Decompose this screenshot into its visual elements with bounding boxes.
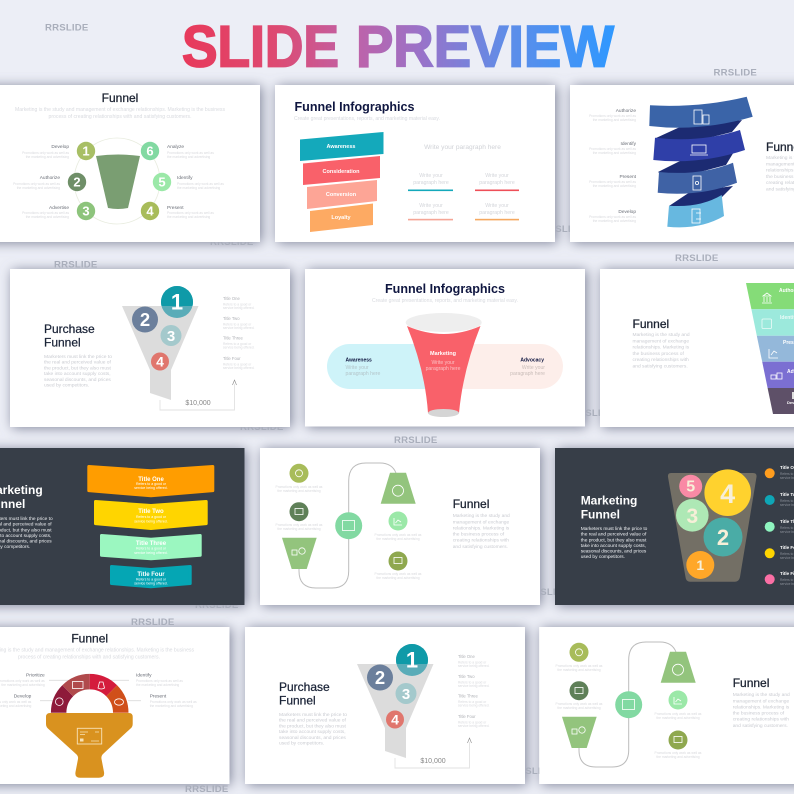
watermarks: RRSLIDE [511,766,555,777]
paragraph placeholders [408,144,519,220]
cone text: Marketing [430,351,456,357]
description: the business process of [453,532,505,538]
heading: Funnel Infographics [294,100,415,114]
value arrow: $10,000 [185,400,211,407]
connector path [299,463,396,588]
heading: Purchase [279,680,330,694]
description: the real and perceived value of [44,360,112,366]
heading: Funnel [71,632,108,646]
subtitle: Create great presentations, reports, and marketing material easy. [372,298,518,304]
cone text: Write your [431,360,455,366]
description: Marketing is the study and [453,513,510,519]
description: take into account supply costs, [279,729,346,735]
ring [74,138,160,224]
step labels: the marketing and advertising [167,215,210,219]
titles list: service being offered. [458,704,490,708]
description [15,107,225,120]
description: the business process of [733,710,785,716]
cone text: paragraph here [426,366,461,372]
titles list [223,296,255,370]
titles list: Title One [223,296,241,301]
labels: the marketing and advertising [593,151,636,155]
description: the product, but they also must [581,537,647,543]
watermarks: RRSLIDE [541,224,585,235]
cone [406,313,482,417]
panel: funnel with awareness and advocacy pills [305,269,585,426]
stacked bars: Conversion [326,192,357,198]
watermarks: RRSLIDE [394,435,438,446]
stacked bars: Loyalty [331,215,352,221]
ribbon bands [649,97,753,227]
heading [44,322,95,350]
description [632,332,690,370]
titles list: Refers to a good or [223,302,252,306]
titles list: Refers to a good or [223,362,252,366]
chevron text: service being offered. [134,520,168,524]
titles list: Refers to a good or [458,660,487,664]
captions [556,664,702,759]
description: used by competitors. [279,740,324,746]
titles list: Title One [458,654,476,659]
panel: funnel with six numbered steps [0,85,260,242]
paragraph placeholders: Write your [485,203,509,209]
labels: the marketing and advertising [150,704,193,708]
heading: Funnel Infographics [385,282,505,296]
labels: Prioritize [26,673,45,679]
numbered balls [132,286,193,370]
circles [570,643,688,750]
watermarks: RRSLIDE [571,408,615,419]
titles list: service being offered. [223,326,255,330]
labels: Develop [14,694,32,700]
captions: the marketing and advertising [277,527,321,531]
step labels: the marketing and advertising [26,215,69,219]
description [44,354,112,388]
numbered circles: 4 [146,204,154,218]
numbered balls: 1 [406,648,418,672]
chevrons [89,466,213,587]
numbered balls: 4 [391,712,399,728]
big funnel [46,713,133,778]
labels: the marketing and advertising [136,683,179,687]
panel: arch funnel [0,627,230,784]
description: and satisfying customers. [733,723,788,729]
chevron text: Title One [138,477,164,483]
numbered circles: 1 [82,144,90,158]
numbered balls: 1 [171,290,183,314]
heading: Funnel [279,694,316,708]
watermarks: RRSLIDE [675,253,719,264]
funnels [282,473,416,569]
description: process of creating relationships with and satisfying customers. [18,654,160,660]
title [182,14,614,80]
chevron text: service being offered. [134,582,168,586]
description [733,692,790,729]
heading: Funnel [44,336,81,350]
stacked bars [300,132,384,232]
heading [0,483,43,511]
description: Marketing is the study and management of exchange relationships. Marketing is the business [15,107,225,113]
description: management of exchange [453,520,510,526]
value arrow [395,738,472,768]
step labels: Develop [51,144,69,150]
panel: dark chevron funnel [0,448,244,605]
description: take into account supply costs, [44,371,111,377]
awareness text [346,358,381,377]
titles list: Title Four [223,356,241,361]
step labels: Promotions only work as well as [22,151,69,155]
balls: 2 [717,525,729,550]
numbered balls: 3 [402,686,410,703]
captions: the marketing and advertising [376,576,420,580]
panel: layered funnel [600,269,794,427]
description: seasonal discounts, and prices [44,377,111,383]
advocacy text: paragraph here [510,371,545,377]
funnels [562,652,696,748]
captions: Promotions only work as well as [655,712,702,716]
description: relationships. Marketing is [453,526,510,532]
description: and satisfying customers. [632,364,688,370]
labels: Promotions only work as well as [589,180,636,184]
chevron text: Title Four [137,572,165,578]
chevron text [134,477,168,586]
card icon [77,728,102,744]
numbered circles: 5 [158,174,166,190]
panel: funnel infographics stacked bars [275,85,555,242]
heading: Marketing [581,494,637,508]
layer icons and labels [762,288,794,405]
description: Marketers must link the price to [581,526,648,532]
balls: 5 [686,479,695,496]
description: creating relationships with [453,538,509,544]
labels [589,108,637,223]
captions: the marketing and advertising [376,537,420,541]
description: management of exchange [632,338,689,344]
advocacy text: Advocacy [520,358,544,364]
description [453,513,510,550]
description [279,712,347,746]
labels: the marketing and advertising [593,184,636,188]
stacked bars: Consideration [323,169,360,175]
description: relationships. Marketing is [733,704,790,710]
paragraph placeholders: paragraph here [479,210,515,216]
captions: Promotions only work as well as [556,702,603,706]
paragraph placeholders: Write your [485,173,509,179]
numbered circles: 6 [146,144,154,158]
labels: Promotions only work as well as [589,215,636,219]
labels: Present [150,694,167,700]
funnel shape [96,154,140,209]
captions: the marketing and advertising [656,755,700,759]
step labels: the marketing and advertising [17,186,60,190]
panel: blue ribbon funnel [570,85,794,242]
advocacy text: Write your [522,365,545,371]
watermarks: RRSLIDE [714,68,757,78]
step labels: the marketing and advertising [177,186,220,190]
captions: Promotions only work as well as [276,523,323,527]
panel: purchase funnel (row 4) [279,644,525,774]
funnel layers [746,283,794,414]
heading [279,680,330,708]
description: Marketing is the study and [632,332,690,338]
titles list [458,654,490,728]
captions: the marketing and advertising [656,716,700,720]
chevron text: Title Two [138,509,164,515]
numbered circles: 3 [82,204,90,218]
watermarks: RRSLIDE [45,22,89,34]
titles list: Title Two [223,316,240,321]
heading: Funnel [453,497,489,511]
chevron text: Refers to a good or [136,482,167,486]
captions: the marketing and advertising [277,489,321,493]
panel: dark marketing funnel with balls [555,448,794,605]
description [766,155,794,192]
step labels: the marketing and advertising [26,155,69,159]
labels: Promotions only work as well as [150,700,197,704]
chevron text: Title Three [136,541,167,547]
step labels: Promotions only work as well as [177,182,224,186]
subtitle: Create great presentations, reports, and marketing material easy. [294,116,440,122]
balls: 1 [696,557,704,573]
balls [676,469,751,579]
labels: Identify [136,673,152,679]
captions: Promotions only work as well as [375,572,422,576]
titles list: Title Two [458,674,475,679]
labels: the marketing and advertising [593,219,636,223]
titles list: Title Three [223,336,243,340]
paragraph placeholders: Write your [419,203,443,209]
description: Marketing is the study and [733,692,790,698]
titles list: service being offered. [223,346,255,350]
description: the real and perceived value of [279,718,347,724]
awareness text: Write your [346,365,369,371]
labels [0,673,197,708]
description: the real and perceived value of [581,532,647,538]
captions: Promotions only work as well as [375,533,422,537]
balls: 4 [720,479,735,509]
paragraph placeholders: paragraph here [413,210,449,216]
titles list: service being offered. [458,724,490,728]
description [0,648,194,660]
watermarks: RRSLIDE [54,260,98,270]
heading: Purchase [44,322,95,336]
chevron text: Refers to a good or [136,546,167,550]
description: used by competitors. [44,382,89,388]
labels: Present [619,174,637,180]
paragraph placeholders: paragraph here [413,180,449,186]
chevron text: Refers to a good or [136,515,167,519]
ribbon icons [690,110,709,223]
description [0,516,53,550]
titles list: service being offered. [223,306,255,310]
description: process of creating relationships with and satisfying customers. [48,114,192,120]
description: used by competitors. [581,554,625,560]
labels: Authorize [616,108,636,114]
stacked bars: Awareness [327,144,355,150]
title: SLIDE [182,14,339,80]
description: seasonal discounts, and prices [279,735,346,741]
description: creating relationships with [733,716,789,722]
description: relationships. Marketing is [632,344,690,350]
bucket [668,473,757,582]
pills [327,344,563,389]
numbered balls: 2 [140,309,150,330]
connector lines [40,680,141,701]
title: PREVIEW [356,14,614,80]
circles [290,464,408,570]
step labels: the marketing and advertising [167,155,210,159]
labels: Develop [618,209,636,215]
numbered circles: 2 [73,174,81,190]
step labels: Present [167,205,184,211]
titles list: Refers to a good or [223,342,252,346]
captions: Promotions only work as well as [276,485,323,489]
description: seasonal discounts, and prices [581,548,647,554]
arch icons [56,682,124,706]
paragraph placeholders: Write your [419,173,443,179]
labels: Promotions only work as well as [589,114,636,118]
chevron text: service being offered. [134,486,168,490]
connector path [579,642,676,767]
description: take into account supply costs, [581,543,646,549]
numbered balls [367,644,428,728]
titles list: service being offered. [458,664,490,668]
captions: the marketing and advertising [557,668,601,672]
description: management of exchange [733,698,790,704]
description: and satisfying customers. [453,544,508,550]
captions: the marketing and advertising [557,706,601,710]
step labels: Authorize [40,175,60,181]
numbered balls: 4 [156,354,164,370]
captions: Promotions only work as well as [556,664,603,668]
numbered circles [68,142,171,220]
watermarks: RRSLIDE [526,587,570,598]
paragraph placeholders: paragraph here [479,180,515,186]
watermarks: RRSLIDE [210,237,254,248]
captions [276,485,422,580]
watermarks: RRSLIDE [131,617,175,628]
step labels: Promotions only work as well as [167,151,214,155]
paragraph placeholders: Write your paragraph here [424,144,501,151]
titles list: Refers to a good or [458,700,487,704]
labels: the marketing and advertising [1,683,45,687]
heading: Funnel [581,508,620,522]
titles list: Title Four [458,714,476,719]
funnel shape [357,664,434,758]
heading: Funnel [632,317,669,331]
heading: Funnel [733,676,769,690]
arch segments [51,674,128,713]
titles list: Title Three [458,694,478,698]
numbered balls: 3 [167,328,175,345]
description: the product, but they also must [279,724,347,730]
titles list: service being offered. [223,366,255,370]
captions: Promotions only work as well as [655,751,702,755]
labels: Promotions only work as well as [136,679,183,683]
watermarks: RRSLIDE [240,422,284,433]
panel: purchase funnel [44,286,283,427]
description: creating relationships with [632,357,689,363]
advocacy text [510,358,545,377]
titles list: Refers to a good or [458,680,487,684]
cone text [426,351,461,372]
description: Marketers must link the price to [44,354,112,360]
labels: the marketing and advertising [593,118,636,122]
chevron text: service being offered. [134,551,168,555]
balls: 3 [686,505,698,528]
awareness text: Awareness [346,358,372,364]
labels: Promotions only work as well as [589,147,636,151]
step labels [13,144,224,219]
step labels: Promotions only work as well as [22,211,69,215]
description [581,526,648,560]
value arrow: $10,000 [420,758,446,765]
step labels: Promotions only work as well as [13,182,60,186]
heading: Funnel [102,91,138,105]
titles list: Refers to a good or [458,720,487,724]
description: the product, but they also must [44,366,112,372]
step labels: Promotions only work as well as [167,211,214,215]
titles list: Refers to a good or [223,322,252,326]
description: Marketers must link the price to [279,712,347,718]
numbered balls: 2 [375,667,385,688]
step labels: Analyze [167,144,184,150]
value arrow [160,380,236,410]
heading [581,494,637,522]
funnel shape [122,306,198,400]
labels: Identify [621,141,637,147]
legend [765,465,794,586]
watermarks: RRSLIDE [195,600,239,611]
chevron text: Refers to a good or [136,578,167,582]
panel: s-curve funnel flow (row 4) [539,627,794,784]
panel: s-curve funnel flow (row 3) [260,448,540,605]
titles list: service being offered. [458,684,490,688]
step labels: Identify [177,175,193,181]
description: the business process of [632,351,685,357]
step labels: Advertise [49,205,69,211]
awareness text: paragraph here [346,371,381,377]
